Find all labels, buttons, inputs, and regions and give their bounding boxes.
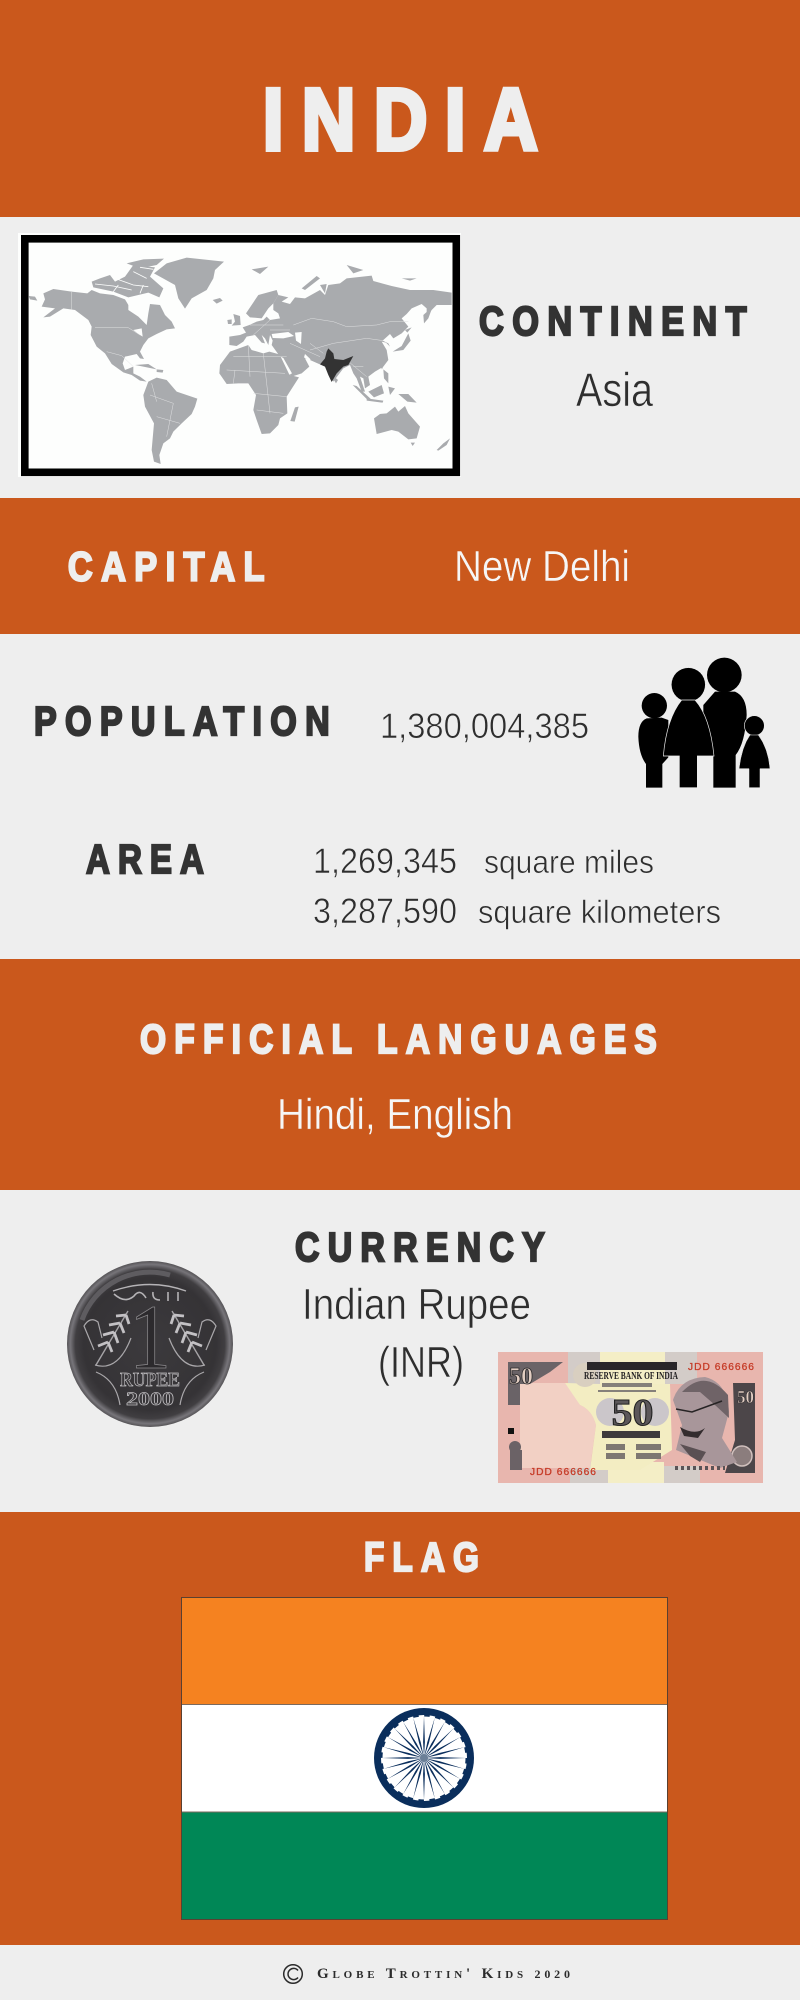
Arctic islands	[92, 265, 163, 297]
Iceland	[213, 298, 223, 304]
icon: fifty rupee banknote: JDD 666666	[530, 1467, 597, 1478]
text: languages: Hindi, English	[277, 1090, 513, 1139]
panel: continent	[0, 217, 800, 498]
title: INDIA	[263, 72, 538, 169]
Japan, Sakhalin, Taiwan	[380, 307, 433, 369]
note centre panel	[565, 1383, 672, 1470]
flag of India	[181, 1597, 668, 1920]
icon: ashoka chakra	[374, 1708, 474, 1808]
note right panel	[725, 1383, 755, 1473]
Scandinavia	[246, 290, 278, 318]
panel: flag	[0, 1512, 800, 1945]
panel: title banner	[0, 0, 800, 217]
footer credit: Globe Trottin' Kids 2020	[317, 1966, 570, 1982]
world map	[18, 233, 461, 477]
icon: rupee coin: RUPEE	[120, 1369, 180, 1391]
note title block	[587, 1362, 677, 1370]
text: currency code: (INR)	[378, 1338, 464, 1387]
icon: rupee coin: 1	[129, 1286, 171, 1388]
icon: fifty rupee banknote: 50	[737, 1387, 754, 1407]
South America	[143, 378, 197, 464]
panel: currency	[0, 1190, 800, 1512]
panel: footer	[0, 1945, 800, 2000]
text: square kilometers unit: square kilometers	[478, 894, 721, 930]
India highlighted	[320, 348, 353, 382]
icon: rupee coin: 2000	[126, 1389, 174, 1410]
heading: population: POPULATION	[34, 698, 338, 744]
text: Asia: Asia	[576, 363, 654, 416]
heading: currency: CURRENCY	[295, 1224, 553, 1270]
panel: capital	[0, 498, 800, 634]
note rosettes	[596, 1398, 624, 1426]
text: New Delhi: New Delhi	[454, 542, 630, 591]
New Zealand	[437, 438, 450, 451]
icon: fifty rupee banknote	[498, 1352, 763, 1483]
Madagascar	[290, 407, 299, 422]
note emblem	[510, 1450, 522, 1470]
text: square kilometers value: 3,287,590	[313, 892, 457, 931]
Arctic channels	[95, 267, 153, 293]
Africa	[219, 345, 299, 434]
note serial numbers: JDD 666666	[688, 1362, 755, 1373]
panel: official languages	[0, 959, 800, 1190]
Cuba and Caribbean	[135, 364, 163, 373]
note left window	[520, 1383, 596, 1468]
note portrait	[673, 1377, 737, 1468]
icon: rupee coin	[67, 1261, 233, 1427]
North America	[42, 289, 175, 382]
Southeast Asia islands	[353, 369, 417, 403]
Country borders	[72, 292, 408, 437]
icon: fifty rupee banknote: RESERVE BANK OF INDIA	[584, 1371, 679, 1382]
Greenland	[154, 258, 224, 309]
Inland seas	[272, 332, 311, 361]
text: currency name: Indian Rupee	[302, 1280, 531, 1329]
note central value: 50	[612, 1392, 654, 1434]
Sri Lanka	[334, 378, 338, 383]
Australia	[374, 406, 420, 446]
text: square miles unit: square miles	[484, 844, 654, 880]
note top-left value	[508, 1362, 563, 1405]
heading: official languages: OFFICIAL LANGUAGES	[140, 1016, 665, 1062]
note top and bottom bands	[600, 1352, 665, 1483]
text: square miles value: 1,269,345	[313, 842, 457, 881]
Alaska islands	[29, 296, 37, 301]
Eurasia	[229, 276, 452, 392]
heading: area: AREA	[86, 836, 212, 882]
heading: flag: FLAG	[364, 1534, 487, 1580]
Arctic Russia islands	[252, 265, 417, 293]
panel: population and area	[0, 634, 800, 959]
heading: continent: CONTINENT	[479, 298, 755, 344]
icon: fifty rupee banknote: 50	[509, 1364, 533, 1390]
British Isles	[227, 314, 241, 326]
icon: copyright	[284, 1965, 302, 1983]
heading: capital: CAPITAL	[68, 544, 273, 590]
icon: family	[638, 658, 770, 788]
text: population value: 1,380,004,385	[380, 707, 589, 746]
